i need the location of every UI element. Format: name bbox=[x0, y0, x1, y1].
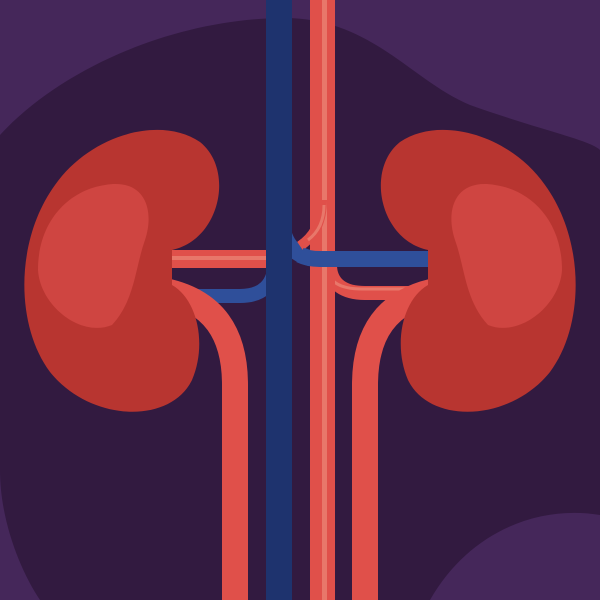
right ureter bbox=[365, 290, 440, 600]
right renal vein over aorta bbox=[300, 255, 432, 259]
left kidney bbox=[24, 130, 219, 412]
right kidney bbox=[381, 130, 576, 412]
left renal artery bbox=[170, 250, 266, 268]
vena cava bbox=[266, 0, 292, 600]
left renal vein bbox=[190, 260, 275, 296]
right renal artery branches bbox=[327, 265, 420, 293]
left ureter bbox=[160, 290, 235, 600]
aorta bbox=[300, 0, 335, 600]
right renal vein bbox=[282, 225, 432, 259]
